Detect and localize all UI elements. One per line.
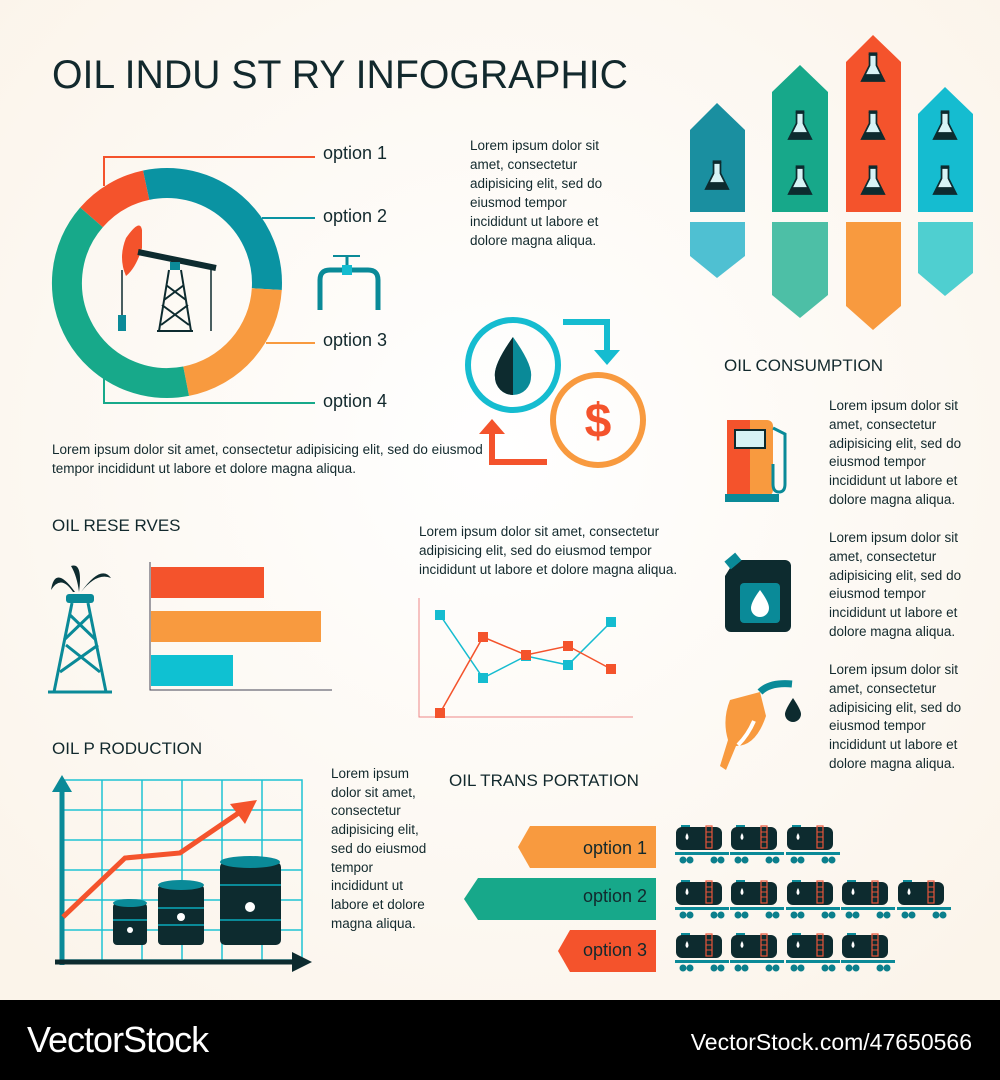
- paragraph: line chart: Lorem ipsum dolor sit amet, consectetur: [419, 524, 660, 539]
- heading: oil consumption: OIL CONSUMPTION: [724, 356, 883, 375]
- consumption text blocks: adipisicing elit, sed do: [829, 700, 961, 715]
- consumption icons: [720, 420, 801, 770]
- text block top: amet, consectetur: [470, 157, 578, 172]
- consumption text blocks: Lorem ipsum dolor sit: [829, 662, 958, 677]
- transport option tags: [464, 826, 656, 972]
- paragraph under donut: tempor incididunt ut labore et dolore magna aliqua.: [52, 461, 356, 476]
- paragraph: production: Lorem ipsum: [331, 766, 409, 781]
- consumption text blocks: eiusmod tempor: [829, 718, 926, 733]
- heading: oil reserves: OIL RESE RVES: [52, 516, 180, 535]
- option lines and labels: [104, 143, 387, 411]
- arrow columns: oil consumption chart: [690, 35, 973, 330]
- consumption text blocks: dolore magna aliqua.: [829, 624, 955, 639]
- transport option tags: option 1: [583, 838, 647, 858]
- paragraph under donut: Lorem ipsum dolor sit amet, consectetur adipisicing elit, sed do eiusmod: [52, 442, 483, 457]
- option lines and labels: option 1: [323, 143, 387, 163]
- option lines and labels: option 2: [323, 206, 387, 226]
- donut chart: [67, 183, 267, 383]
- icon: barrels: [113, 856, 281, 945]
- consumption text blocks: amet, consectetur: [829, 681, 937, 696]
- consumption text blocks: eiusmod tempor: [829, 454, 926, 469]
- icon: canister: [724, 553, 791, 632]
- paragraph: production: tempor: [331, 860, 374, 875]
- footer: VectorStock: [27, 1019, 210, 1060]
- paragraph: production: sed do eiusmod: [331, 841, 426, 856]
- icon: fuel pump: [725, 420, 785, 502]
- paragraph: production: dolor sit amet,: [331, 785, 416, 800]
- text block top: eiusmod tempor: [470, 195, 567, 210]
- consumption text blocks: amet, consectetur: [829, 549, 937, 564]
- consumption text blocks: incididunt ut labore et: [829, 737, 958, 752]
- text block top: dolore magna aliqua.: [470, 233, 596, 248]
- trains: [675, 825, 951, 972]
- paragraph: production: adipisicing elit,: [331, 822, 419, 837]
- paragraph: production: consectetur: [331, 803, 401, 818]
- paragraph under donut: [52, 442, 483, 476]
- footer: VectorStock.com/47650566: [691, 1029, 972, 1055]
- consumption text blocks: amet, consectetur: [829, 417, 937, 432]
- consumption text blocks: dolore magna aliqua.: [829, 492, 955, 507]
- production chart: [52, 775, 312, 972]
- title: OIL INDU ST RY INFOGRAPHIC: [52, 53, 628, 97]
- consumption text blocks: adipisicing elit, sed do: [829, 436, 961, 451]
- paragraph: line chart: incididunt ut labore et dolore magna aliqua.: [419, 562, 677, 577]
- transport option tags: option 3: [583, 940, 647, 960]
- bar chart: reserves: [150, 562, 332, 690]
- paragraph: production: [331, 766, 426, 931]
- paragraph: production: incididunt ut: [331, 878, 403, 893]
- heading: oil production: OIL P RODUCTION: [52, 739, 202, 758]
- icon: oil to money cycle: [468, 320, 643, 465]
- heading: oil transportation: OIL TRANS PORTATION: [449, 771, 639, 790]
- option lines and labels: option 3: [323, 330, 387, 350]
- icon: pump jack: [118, 226, 216, 331]
- icon: oil derrick gusher: [48, 566, 112, 692]
- consumption text blocks: incididunt ut labore et: [829, 473, 958, 488]
- icon: nozzle: [720, 684, 801, 770]
- consumption text blocks: eiusmod tempor: [829, 586, 926, 601]
- text block top: incididunt ut labore et: [470, 214, 599, 229]
- text block top: Lorem ipsum dolor sit: [470, 138, 599, 153]
- consumption text blocks: Lorem ipsum dolor sit: [829, 530, 958, 545]
- icon: oil to money cycle: $: [585, 395, 612, 448]
- consumption text blocks: dolore magna aliqua.: [829, 756, 955, 771]
- option lines and labels: option 4: [323, 391, 387, 411]
- consumption text blocks: Lorem ipsum dolor sit: [829, 398, 958, 413]
- text block top: adipisicing elit, sed do: [470, 176, 602, 191]
- consumption text blocks: [829, 398, 961, 771]
- icon: pipe valve: [320, 256, 378, 310]
- text block top: [470, 138, 602, 248]
- consumption text blocks: incididunt ut labore et: [829, 605, 958, 620]
- paragraph: line chart: [419, 524, 677, 577]
- footer: [0, 1000, 1000, 1080]
- paragraph: line chart: adipisicing elit, sed do eiusmod tempor: [419, 543, 652, 558]
- paragraph: production: magna aliqua.: [331, 916, 416, 931]
- line chart: [419, 598, 633, 718]
- consumption text blocks: adipisicing elit, sed do: [829, 568, 961, 583]
- transport option tags: option 2: [583, 886, 647, 906]
- paragraph: production: labore et dolore: [331, 897, 425, 912]
